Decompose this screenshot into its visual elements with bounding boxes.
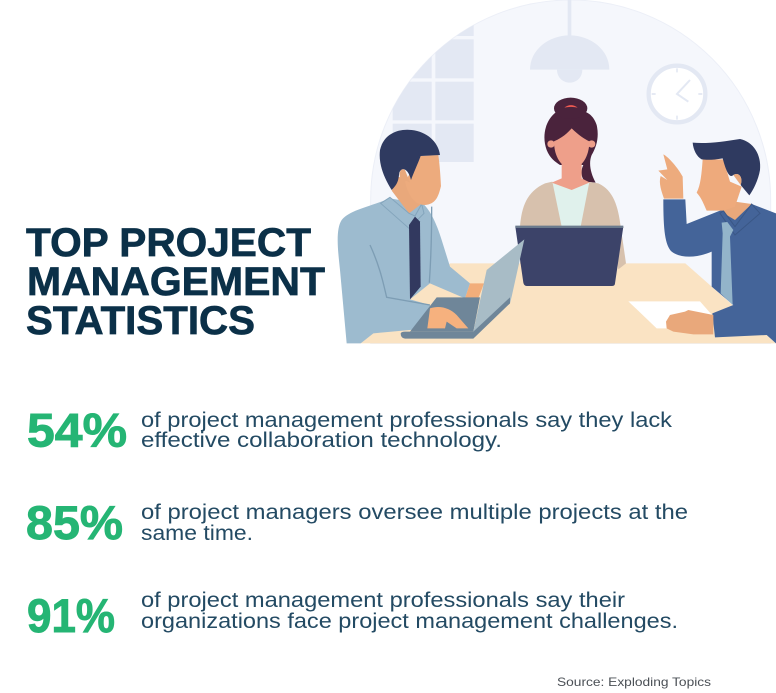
stat: 54%: of project management professionals say they lack bbox=[141, 409, 673, 432]
stat: 91%: 91% bbox=[27, 589, 115, 642]
paper bbox=[628, 301, 712, 328]
title: MANAGEMENT bbox=[27, 260, 325, 304]
stat: 54%: 54% bbox=[27, 404, 127, 456]
background dome bbox=[371, 0, 771, 343]
illustration: team meeting bbox=[338, 0, 776, 343]
stat: 85%: 85% bbox=[26, 496, 123, 549]
stat: 85%: same time. bbox=[141, 522, 253, 545]
pendant lamp bbox=[530, 0, 609, 83]
stat: 54%: effective collaboration technology. bbox=[141, 429, 502, 452]
man on left with laptop bbox=[338, 130, 524, 343]
table bbox=[361, 263, 776, 343]
source note: Source: Exploding Topics bbox=[557, 675, 711, 689]
stat: 91%: organizations face project management challenges. bbox=[141, 610, 678, 633]
wall clock bbox=[649, 66, 705, 122]
title bbox=[26, 221, 325, 343]
stat: 91% bbox=[27, 589, 678, 642]
man on right gesturing bbox=[658, 139, 776, 343]
stat: 54% bbox=[27, 404, 673, 456]
woman with laptop bbox=[515, 98, 626, 286]
title: TOP PROJECT bbox=[26, 221, 311, 265]
stat: 91%: of project management professionals say their bbox=[141, 589, 625, 612]
stat: 85% bbox=[26, 496, 688, 549]
title: STATISTICS bbox=[26, 299, 255, 343]
stat: 85%: of project managers oversee multiple projects at the bbox=[141, 501, 688, 524]
window bbox=[392, 26, 474, 162]
